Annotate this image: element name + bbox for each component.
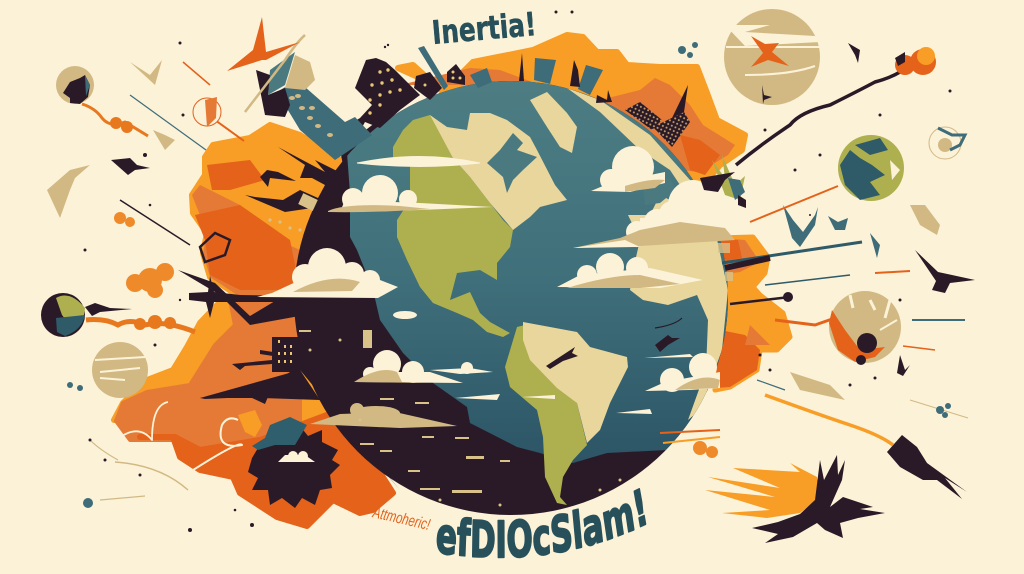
building on dark bbox=[278, 340, 292, 363]
teal bird bbox=[783, 205, 880, 258]
panel: left orange explosion cloud bbox=[114, 125, 400, 526]
tangled disc upper right bbox=[929, 127, 965, 159]
raven: right with beak bbox=[765, 395, 967, 499]
label: Attmoheric!: Attmoheric! bbox=[370, 502, 432, 533]
globe bbox=[294, 60, 740, 515]
skyline: top-left buildings bbox=[340, 58, 465, 148]
Hudson Bay bbox=[487, 133, 537, 193]
icon: tan and orange planet right bbox=[829, 291, 901, 365]
flock: dark birds on South America bbox=[546, 318, 682, 369]
cloud: south-west bbox=[354, 350, 463, 383]
city grids on left bbox=[268, 193, 733, 281]
birds: small icons bbox=[111, 43, 975, 376]
landmass: North America cream bbox=[430, 113, 567, 230]
icon: planet with orange star bbox=[724, 9, 820, 105]
Greenland bbox=[530, 92, 577, 153]
cloud: small south-east bbox=[645, 353, 720, 392]
comet: orange ball and dark trail top right bbox=[736, 47, 936, 165]
scattered specks bbox=[84, 10, 952, 532]
cloud: long lens north bbox=[357, 156, 480, 166]
teal speckle clusters bbox=[67, 42, 951, 508]
cloud: large east bbox=[573, 180, 736, 248]
landmass: South America olive bbox=[505, 325, 587, 505]
panel: top-right orange explosion cloud bbox=[398, 35, 745, 185]
landmass: Africa and Eurasia limb bbox=[567, 88, 728, 420]
illustration: left dark city silhouette bbox=[178, 115, 400, 490]
icon: small planet with dark bird bbox=[56, 66, 94, 104]
cloud: north-east bbox=[591, 146, 665, 192]
icon: teal planet top right bbox=[838, 135, 904, 201]
skyline: top-right grid buildings bbox=[625, 85, 690, 147]
icon: tan gas planet left bbox=[92, 342, 148, 398]
cloud: tan lower bbox=[310, 403, 457, 428]
windows bbox=[345, 68, 462, 139]
skyline: teal tower bbox=[277, 80, 372, 160]
panel: right orange explosion cloud bbox=[715, 237, 790, 390]
raven: large lower right with orange burst bbox=[705, 455, 885, 543]
cloud: north-west bbox=[328, 175, 493, 212]
gold specks on dark sea bbox=[299, 330, 622, 506]
orange smoke puffs bbox=[114, 212, 718, 458]
arrows and streaks radiating from globe bbox=[90, 62, 968, 500]
skull-like disc upper left bbox=[193, 97, 221, 127]
tangled scribble: medallion bbox=[200, 233, 230, 262]
cloud: west bbox=[257, 248, 398, 298]
skyline: right-side foliage bbox=[700, 155, 745, 200]
icon: ringed saturn with orange star bbox=[227, 17, 315, 117]
heading: Inertia!: Inertia! bbox=[430, 5, 538, 52]
icon: small earth far left bbox=[41, 293, 85, 337]
small cloud wisps bbox=[393, 311, 693, 414]
landmass: South America cream bbox=[523, 322, 628, 443]
comet: orange trail from small planet bbox=[82, 104, 148, 136]
spike and trail from far-left earth bbox=[85, 303, 195, 332]
dark flower burst with teal cloud bbox=[248, 417, 340, 508]
cloud: mid east bbox=[557, 253, 703, 288]
skyline: top buildings bbox=[418, 46, 612, 103]
heading: efDIOcSlam!: efDIOcSlam! bbox=[436, 488, 646, 558]
globe ocean bbox=[340, 60, 740, 463]
tan silhouettes bbox=[47, 60, 940, 400]
landmass: North America olive bbox=[393, 115, 513, 337]
